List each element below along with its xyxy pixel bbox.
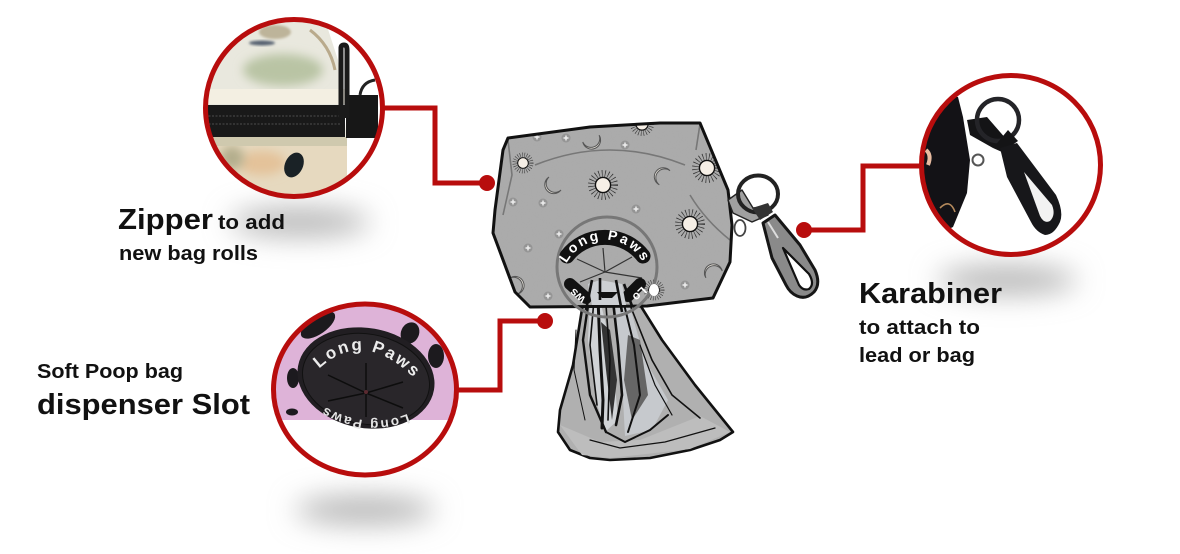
product: poop bag dispenser (492, 122, 820, 462)
callout: dispenser slot (271, 302, 553, 478)
pouch printed pattern (503, 115, 730, 301)
label: zipper: to add (218, 211, 285, 234)
zipper connector dot (479, 175, 495, 191)
callout: karabiner (796, 74, 1104, 258)
zoom photo: slot (276, 306, 454, 429)
label: zipper: Zipper (118, 204, 213, 236)
dispenser slot badge (556, 216, 659, 318)
zoom photo: zipper (205, 20, 385, 197)
zipper circle ring (206, 20, 382, 196)
karabiner connector dot (796, 222, 812, 238)
pouch karabiner clip (728, 176, 818, 297)
zipper connector line (384, 108, 487, 183)
dispenser pouch body (493, 115, 732, 307)
label: zipper (118, 204, 285, 265)
karabiner connector line (805, 166, 920, 230)
label: dispenser slot: Soft Poop bag (37, 360, 183, 383)
label: dispenser slot (37, 360, 250, 421)
slot connector dot (537, 313, 553, 329)
dispenser slot badge: Lo (630, 284, 650, 304)
callout: zipper (205, 20, 495, 197)
label: karabiner: lead or bag (859, 344, 975, 367)
zoom photo: slot: Long Paws (323, 408, 410, 429)
shadow: zipper callout (230, 208, 370, 236)
label: dispenser slot: dispenser Slot (37, 389, 250, 421)
dangling poop bag (558, 280, 733, 460)
label: karabiner (859, 278, 1002, 367)
dispenser slot badge: ws (566, 285, 589, 307)
dispenser slot badge: Long Paws (558, 230, 648, 263)
shadow: slot callout (295, 496, 435, 524)
slot connector line (457, 321, 545, 390)
label: karabiner: Karabiner (859, 278, 1002, 310)
zoom photo: karabiner (924, 96, 1062, 252)
zoom photo: slot: Long Paws (312, 340, 418, 376)
label: karabiner: to attach to (859, 316, 980, 339)
label: zipper: new bag rolls (119, 242, 258, 265)
karabiner circle ring (922, 76, 1100, 254)
slot circle ring (274, 304, 456, 475)
shadow: karabiner callout (937, 266, 1077, 294)
